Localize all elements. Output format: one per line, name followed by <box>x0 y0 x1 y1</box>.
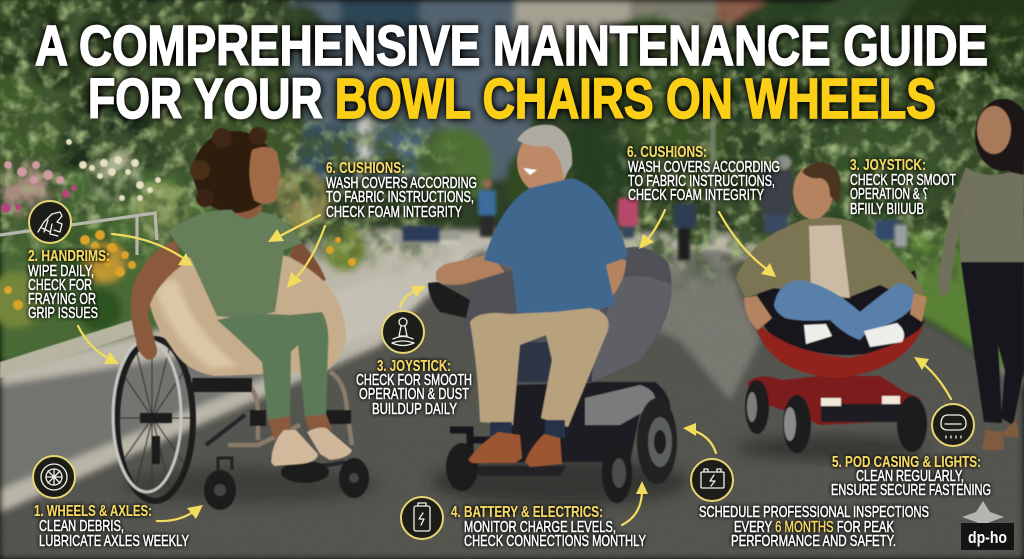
text: 6. cushions left: WASH COVERS ACCORDING <box>326 175 477 192</box>
text: 2. handrims: CHECK FOR <box>28 277 92 294</box>
text: 6. cushions right: CHECK FOAM INTEGRITY <box>628 187 764 204</box>
text: 3. joystick centre: CHECK FOR SMOOTH <box>356 372 472 389</box>
shoes <box>271 430 318 466</box>
head with curly hair <box>233 205 262 226</box>
text: 6. cushions right: 6. CUSHIONS: <box>627 144 707 161</box>
text: 3. joystick right (garbled as in original): BFIILY BIIUUB <box>850 201 924 218</box>
khaki trousers <box>470 308 609 427</box>
manual wheelchair frame and wheels <box>113 339 369 510</box>
text: schedule professional inspections: SCHEDULE PROFESSIONAL INSPECTIONS <box>699 504 929 521</box>
arrow: service to rear wheel <box>683 423 716 453</box>
text: 6. cushions right: TO FABRIC INSTRUCTIONS, <box>628 173 775 190</box>
text: 5. pod casing and lights: CLEAN REGULARLY, <box>856 468 964 485</box>
text: 2. handrims: FRAYING OR <box>28 291 96 308</box>
icon: service battery <box>691 459 733 501</box>
text: 3. joystick centre: 3. JOYSTICK: <box>377 358 451 375</box>
leather shoes <box>468 432 562 467</box>
arrow: cushions to grey seat <box>639 210 665 249</box>
arrow: battery to base <box>622 481 648 525</box>
text: schedule professional inspections <box>699 504 929 550</box>
text: 4. battery and electrics: 4. BATTERY & ELECTRICS: <box>451 504 603 521</box>
text: 5. pod casing and lights: 5. POD CASING & LIGHTS: <box>832 454 981 471</box>
text: 1. wheels and axles <box>34 503 189 550</box>
beige bowl seat <box>148 255 346 376</box>
text: 1. wheels and axles: 1. WHEELS & AXLES: <box>34 503 152 520</box>
text: 3. joystick right (garbled as in original): 3. JOYSTICK: <box>850 157 926 174</box>
text: 2. handrims: WIPE DAILY, <box>28 263 94 280</box>
grey bowl seat <box>463 247 672 385</box>
arrow: wheels to caster <box>157 505 203 521</box>
blue shirt <box>484 178 628 316</box>
text: 4. battery and electrics <box>451 504 646 550</box>
text: schedule professional inspections: PERFORMANCE AND SAFETY. <box>731 533 896 550</box>
text: 4. battery and electrics: MONITOR CHARGE LEVELS, <box>464 519 616 536</box>
text: 3. joystick right (garbled as in original) <box>850 157 956 218</box>
text: 1. wheels and axles: LUBRICATE AXLES WEEKLY <box>39 533 189 550</box>
red bowl <box>754 320 924 378</box>
figure: young man cross-legged in red bowl pod <box>736 163 927 453</box>
text: 6. cushions left: 6. CUSHIONS: <box>326 160 405 177</box>
arrow: cushions to beige seat back <box>268 215 320 242</box>
jacket <box>736 217 925 300</box>
green t-shirt <box>168 210 302 317</box>
power base and wheels <box>446 382 677 503</box>
arrow: handrims to wheel rim top <box>112 234 193 266</box>
far arm <box>290 238 326 284</box>
arrow: cushions to black bowl lining <box>719 212 776 277</box>
text: 6. cushions right <box>627 144 780 204</box>
jeans and white shoes <box>774 280 915 340</box>
title <box>35 14 988 131</box>
icon: wheel <box>33 456 75 498</box>
figure: woman walking on the right <box>937 99 1024 450</box>
black bowl lining <box>757 270 924 355</box>
leggings <box>217 312 328 420</box>
flower beds <box>1 139 356 310</box>
text: 6. cushions left: TO FABRIC INSTRUCTIONS, <box>326 189 474 206</box>
text: schedule professional inspections: EVERY 6 MONTHS FOR PEAK <box>734 519 894 536</box>
icon: pod casing <box>932 404 974 446</box>
text: 6. cushions left: CHECK FOAM INTEGRITY <box>326 204 462 221</box>
head <box>517 131 569 193</box>
text: 3. joystick centre: BUILDUP DAILY <box>372 401 457 418</box>
arrow: pod casing to bowl <box>914 357 951 399</box>
joystick pad <box>428 282 470 318</box>
t-shirt and head <box>809 225 850 298</box>
text: 4. battery and electrics: CHECK CONNECTIONS MONTHLY <box>464 533 646 550</box>
text: 2. handrims <box>28 248 110 322</box>
text: 5. pod casing and lights <box>831 454 991 499</box>
logo: dp-ho: dp-ho <box>968 528 1007 547</box>
text: 3. joystick right (garbled as in original): CHECK FOR SMOOT <box>850 172 956 189</box>
logo: dp-ho <box>961 501 1014 550</box>
text: 1. wheels and axles: CLEAN DEBRIS, <box>39 518 124 535</box>
figure: woman in manual wheelchair with beige bowl seat <box>113 127 369 510</box>
text: 3. joystick right (garbled as in original): OPERATION & ⸮ <box>850 186 928 203</box>
text: 3. joystick centre: OPERATION & DUST <box>359 386 469 403</box>
arrow: handrims to wheel rim <box>78 326 119 364</box>
red base and wheels <box>745 376 927 453</box>
text: 2. handrims: GRIP ISSUES <box>28 305 98 322</box>
icon: handrims hands <box>29 201 71 243</box>
icon: battery <box>401 497 443 539</box>
arms <box>436 254 505 285</box>
text: 3. joystick centre <box>356 358 472 418</box>
icon: joystick <box>382 311 424 353</box>
text: 6. cushions right: WASH COVERS ACCORDING <box>628 159 780 176</box>
figure: older man in power wheelchair with grey bowl seat <box>428 125 677 503</box>
near arm <box>131 240 182 360</box>
text: 2. handrims: 2. HANDRIMS: <box>28 248 110 265</box>
arrow: cushions to beige seat <box>287 226 325 288</box>
text: 6. cushions left <box>326 160 477 221</box>
arrow: joystick <box>400 286 426 307</box>
